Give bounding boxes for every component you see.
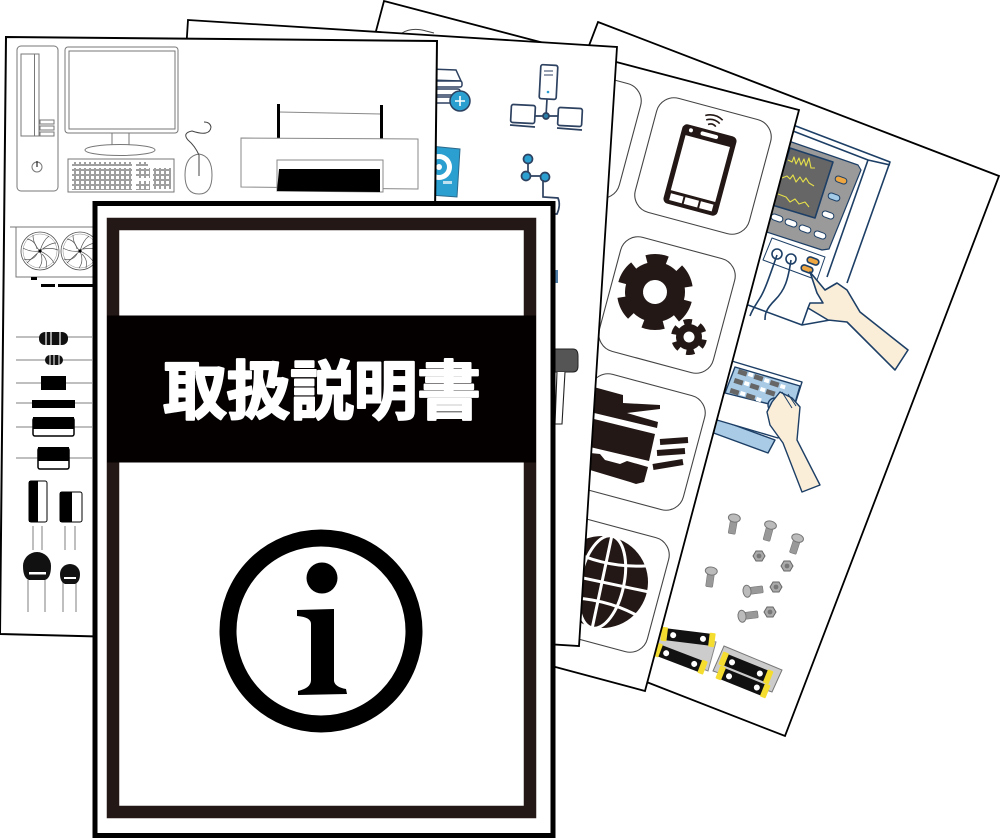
icon: share hand (522, 154, 559, 214)
icon: hard disk (426, 146, 460, 197)
cover: instruction manual (95, 204, 553, 836)
icon card: globe (529, 512, 673, 656)
illustration: screws and nuts (703, 513, 805, 623)
mouse (185, 122, 212, 194)
icon: information symbol (228, 538, 414, 724)
icon: network of server and laptops (510, 65, 582, 130)
title text: 取扱説明書 (163, 356, 481, 428)
illustration: desktop pc (17, 46, 212, 194)
monitor (65, 47, 178, 156)
icon: server add (430, 69, 470, 111)
illustration: electronic components (16, 332, 92, 612)
sheet: icon manual (230, 1, 799, 691)
title band (107, 316, 536, 462)
illustration: pointing hand (808, 272, 908, 370)
icon card: copier (565, 370, 709, 514)
icon card: gears (595, 233, 739, 377)
illustration: control panel with hand (700, 355, 820, 492)
illustration: printer (241, 104, 418, 192)
icon card: smartphone (631, 94, 775, 238)
sheet: network manual (150, 20, 617, 646)
sheet: medical device manual (385, 22, 999, 736)
icon card: partial top (402, 29, 645, 202)
pc tower (17, 46, 58, 191)
device fragment (550, 270, 578, 424)
sheet: pc and electronics manual (0, 37, 437, 645)
cover inner frame (113, 224, 530, 812)
keyboard (68, 159, 174, 192)
illustration: batteries (652, 627, 782, 699)
illustration: graphics card (10, 227, 110, 287)
illustration: patient monitor (745, 120, 908, 370)
